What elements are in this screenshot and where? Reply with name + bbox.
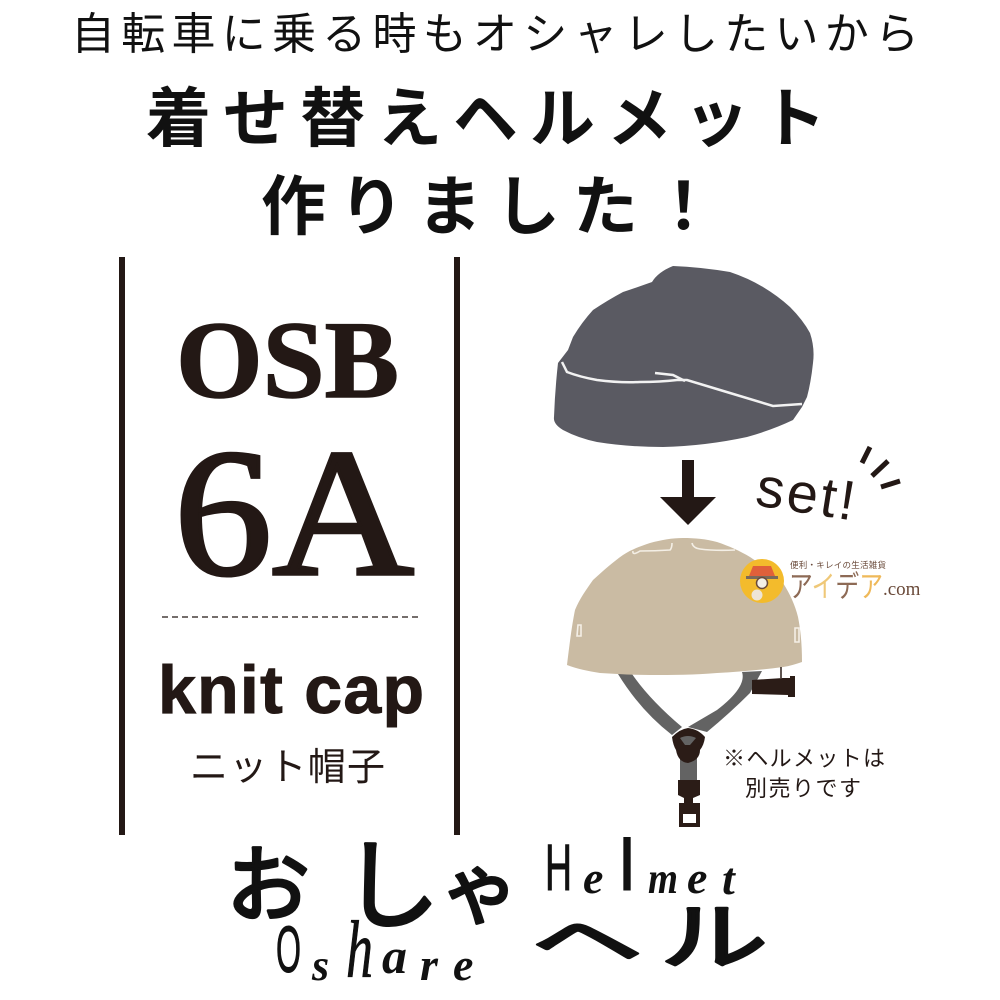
chin buckle [678, 780, 700, 827]
logotype Oshare: お [226, 839, 310, 933]
logotype Helmet: l [619, 826, 635, 906]
logotype Helmet [532, 826, 768, 979]
right frame line [454, 257, 460, 835]
logotype Oshare: s [311, 941, 329, 990]
side buckle [780, 667, 782, 678]
logotype Helmet: m [648, 854, 678, 903]
left frame line [119, 257, 125, 835]
title line 1: 着せ替えヘルメット [146, 82, 826, 155]
icon: helmet [567, 538, 802, 827]
logotype Helmet: H [545, 830, 572, 904]
logotype Helmet: e [583, 852, 603, 903]
logotype Oshare: ゃ [441, 846, 519, 934]
set label: set! [752, 455, 860, 532]
model number 6A: 6A [174, 413, 414, 614]
note: ※ヘルメットは [723, 746, 885, 771]
logo: 便利・キレイの生活雑貨 [790, 560, 886, 570]
helmet shell [567, 538, 802, 675]
logotype Oshare: h [346, 904, 373, 995]
logotype Helmet: t [722, 853, 736, 904]
title line 2: 作りました！ [261, 170, 716, 243]
tagline: 自転車に乗る時もオシャレしたいから [71, 10, 919, 59]
logotype Oshare [226, 831, 519, 995]
logotype Oshare: O [276, 912, 301, 986]
note: 別売りです [745, 776, 861, 801]
icon: knit cap [554, 266, 814, 447]
logo [740, 559, 921, 604]
chin adjuster [672, 728, 705, 763]
product name Japanese: ニット帽子 [190, 747, 385, 789]
logo: アイデア [789, 571, 883, 604]
logotype Oshare: e [453, 939, 473, 990]
logotype Helmet: ヘ [532, 911, 642, 972]
dashed divider [162, 616, 418, 618]
model number OSB: OSB [176, 299, 399, 421]
note [723, 746, 885, 801]
straps [618, 674, 682, 735]
logotype Oshare: し [342, 831, 440, 941]
product name knit cap: knit cap [158, 652, 424, 728]
logotype Helmet: e [687, 852, 707, 903]
logotype Helmet: ル [660, 896, 768, 979]
logo: .com [883, 579, 921, 600]
set label [752, 447, 900, 532]
logotype Oshare: a [382, 928, 407, 984]
logotype Oshare: r [420, 939, 439, 990]
arrow: down [660, 460, 716, 525]
